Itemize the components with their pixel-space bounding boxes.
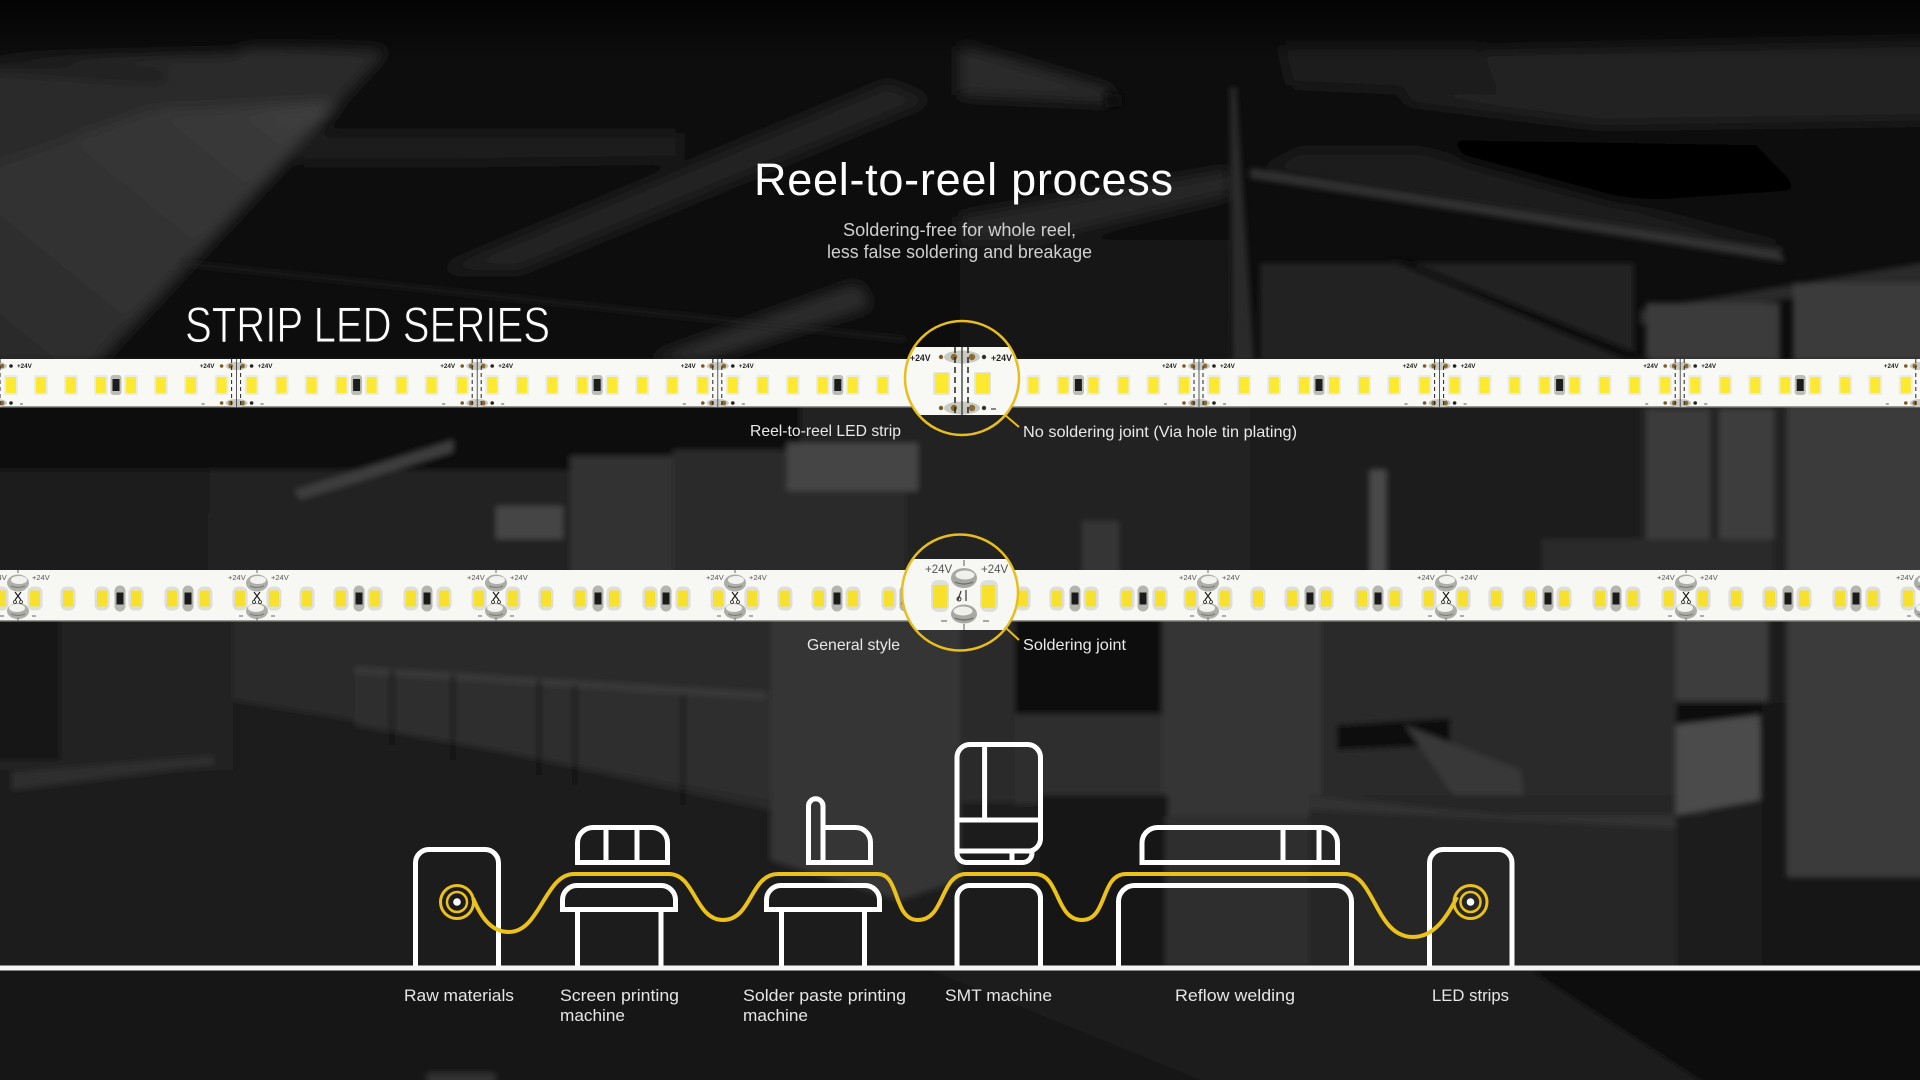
general style LED strip: +24V	[467, 573, 485, 582]
general style LED strip	[0, 570, 1920, 622]
bottom	[0, 970, 1920, 1080]
process labels	[404, 986, 1509, 1025]
general style LED strip: +24V	[1700, 573, 1718, 582]
reel-to-reel LED strip	[0, 359, 1920, 408]
general style LED strip: +24V	[228, 573, 246, 582]
subtitle: less false soldering and breakage	[827, 242, 1092, 262]
general style LED strip: +24V	[1657, 573, 1675, 582]
general style LED strip: +24V	[1460, 573, 1478, 582]
general style LED strip: +24V	[271, 573, 289, 582]
magnifier: soldering joint: +24V	[925, 564, 953, 576]
general style LED strip: +24V	[32, 573, 50, 582]
series heading: STRIP LED SERIES	[185, 297, 550, 353]
reel-to-reel LED strip: +24V	[440, 363, 456, 370]
general style LED strip: +24V	[1417, 573, 1435, 582]
icon: LED strips cabinet	[1430, 850, 1512, 968]
process labels: Solder paste printing	[743, 986, 906, 1005]
subtitle	[827, 220, 1092, 262]
general style LED strip: +24V	[706, 573, 724, 582]
reel-to-reel LED strip: +24V	[739, 363, 754, 370]
magnifier: no soldering joint	[900, 321, 1024, 435]
process labels: LED strips	[1432, 986, 1509, 1005]
icon: raw materials cabinet	[416, 850, 498, 968]
icon: solder paste printing machine	[766, 799, 880, 968]
icon: screen printing machine	[562, 828, 676, 968]
ceiling	[0, 0, 1920, 370]
reel-to-reel LED strip: +24V	[1162, 363, 1178, 370]
reel-to-reel LED strip: +24V	[1461, 363, 1476, 370]
general style LED strip: +24V	[1179, 573, 1197, 582]
icon: reflow welding oven	[1118, 828, 1352, 968]
callout labels: Soldering joint	[1023, 637, 1127, 654]
reel-to-reel LED strip: +24V	[1220, 363, 1236, 370]
callout labels: Reel-to-reel LED strip	[750, 423, 901, 440]
magnifier: no soldering joint: +24V	[991, 353, 1012, 363]
general style LED strip: +24V	[749, 573, 767, 582]
general style LED strip: +24V	[510, 573, 528, 582]
callout labels: No soldering joint (Via hole tin plating)	[1023, 424, 1297, 441]
process labels: Screen printing	[560, 986, 679, 1005]
reel-to-reel LED strip: +24V	[17, 363, 33, 370]
lower band	[0, 610, 1920, 970]
reel-to-reel LED strip: +24V	[681, 363, 696, 370]
magnifier: no soldering joint: +24V	[910, 353, 930, 363]
callout labels: General style	[807, 637, 900, 654]
process labels: machine	[560, 1006, 625, 1025]
process labels: SMT machine	[945, 986, 1052, 1005]
callout labels	[750, 423, 1297, 654]
icon: SMT machine	[957, 744, 1041, 968]
reel-to-reel LED strip: +24V	[498, 363, 514, 370]
subtitle: Soldering-free for whole reel,	[843, 220, 1076, 240]
reel-to-reel LED strip: +24V	[1403, 363, 1418, 370]
title: Reel-to-reel process	[754, 154, 1173, 205]
magnifier: soldering joint	[900, 534, 1020, 650]
reel-to-reel LED strip: +24V	[1884, 363, 1899, 370]
reel-to-reel LED strip: +24V	[1701, 363, 1717, 370]
process labels: Reflow welding	[1175, 986, 1295, 1005]
icon: raw material reel	[440, 886, 474, 918]
general style LED strip: +24V	[1896, 573, 1914, 582]
middle band	[0, 360, 1920, 620]
reel-to-reel LED strip: +24V	[258, 363, 273, 370]
reel-to-reel LED strip: +24V	[1643, 363, 1659, 370]
reel-to-reel LED strip: +24V	[200, 363, 215, 370]
process labels: Raw materials	[404, 986, 514, 1005]
magnifier: soldering joint: +24V	[981, 564, 1009, 576]
general style LED strip: +24V	[1222, 573, 1240, 582]
process labels: machine	[743, 1006, 808, 1025]
yellow LED strip path through machines	[473, 874, 1457, 937]
icon: finished LED reel	[1454, 886, 1487, 918]
ground line	[0, 966, 1920, 970]
